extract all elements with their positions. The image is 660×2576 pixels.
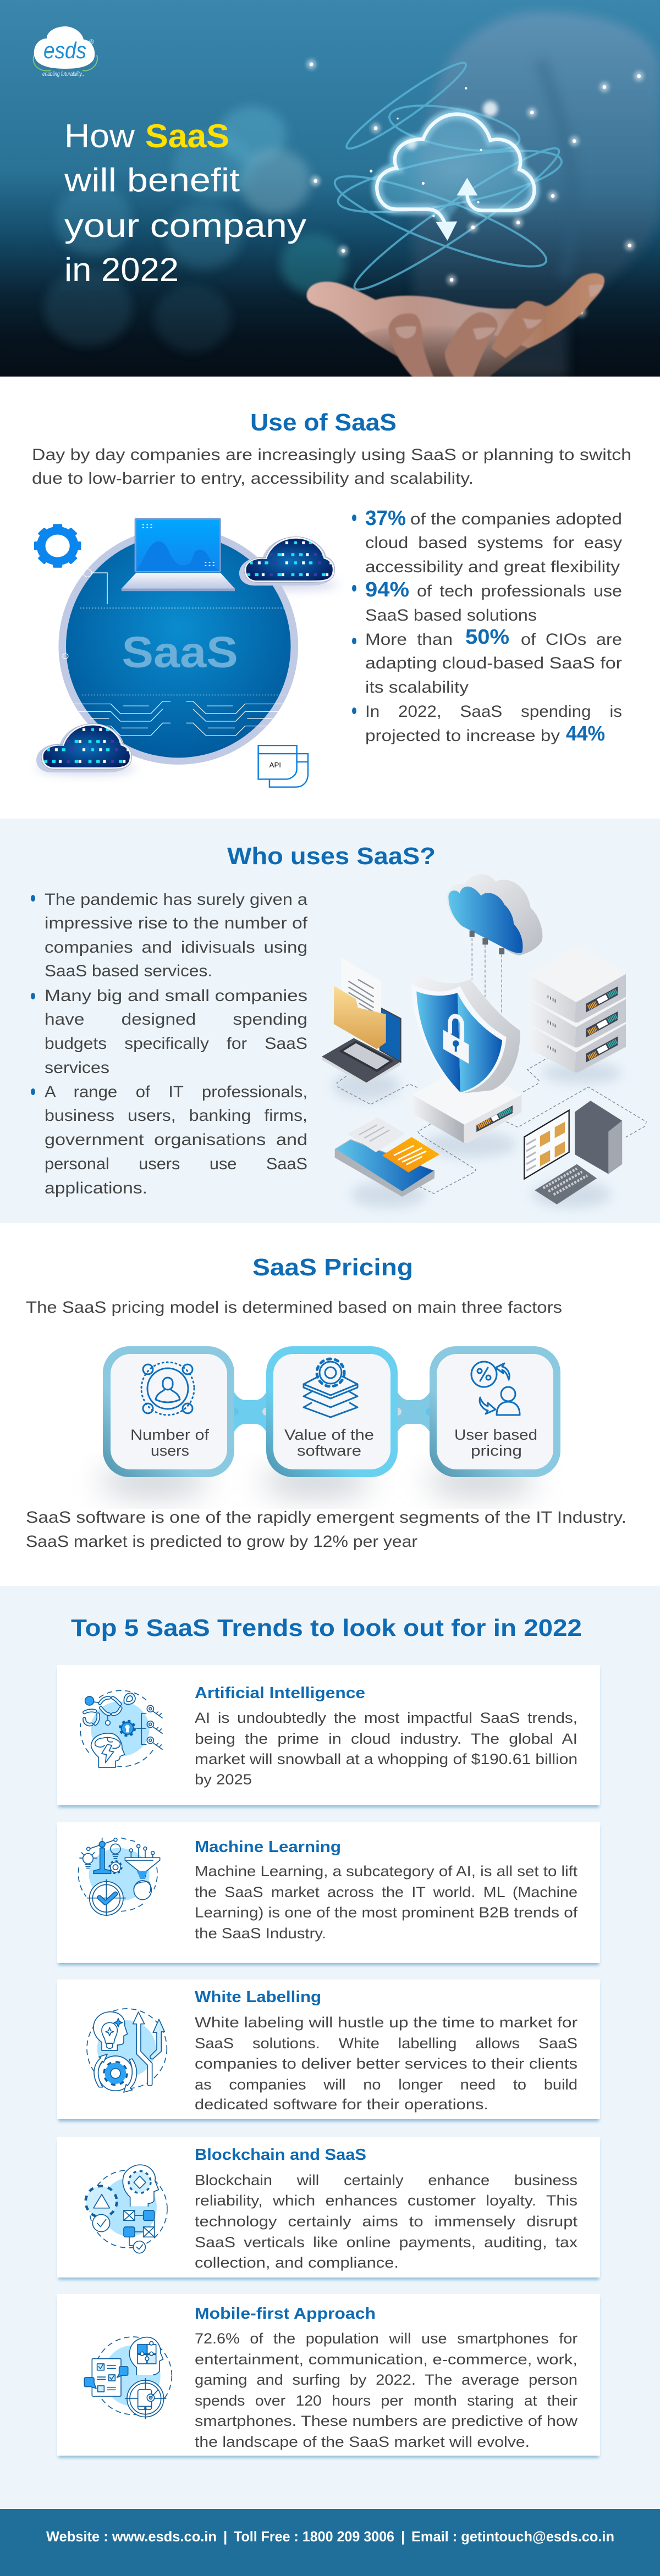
heading: Use of SaaS: Use of SaaS — [250, 409, 397, 436]
footer contact details: Toll Free : 1800 209 3006 — [234, 2528, 394, 2545]
bullet list: who uses SaaS: The pandemic has surely given a — [45, 891, 307, 909]
bullet list: use of SaaS stats: projected to increase by — [365, 727, 560, 745]
pricing closing text — [26, 1508, 626, 1551]
panel: hero banner — [0, 0, 660, 377]
cloud left — [36, 723, 132, 772]
bullet list: use of SaaS stats: 44% — [566, 722, 605, 745]
card text: machine learning: Learning) is one of the most prominent B2B trends of — [195, 1904, 578, 1921]
bullet list: who uses SaaS: personal users use SaaS — [45, 1155, 307, 1173]
card text: artificial intelligence — [195, 1684, 578, 1788]
bullet list: use of SaaS stats: SaaS based solutions — [365, 606, 537, 624]
bullet list: use of SaaS stats: More than — [365, 631, 453, 649]
bullet list: who uses SaaS: SaaS based services. — [45, 962, 212, 980]
panel: top 5 trends — [0, 1586, 660, 2509]
bullet list: who uses SaaS — [31, 891, 308, 1197]
bullet list: use of SaaS stats: of the companies adopted — [410, 510, 622, 528]
logo: esds cloud — [34, 26, 97, 71]
card text: white labelling: as companies will no longer need to build — [195, 2076, 578, 2093]
bullet list: use of SaaS stats: In 2022, SaaS spending is — [365, 703, 622, 721]
label: user based pricing — [454, 1427, 537, 1459]
desktop computer — [524, 1101, 622, 1204]
soft shadows — [37, 579, 338, 774]
label: value of the software: Value of the — [284, 1427, 374, 1443]
icon: API document — [258, 745, 308, 787]
cloud — [447, 874, 542, 955]
card text: white labelling: White Labelling — [195, 1988, 321, 2006]
hero title: How — [64, 118, 135, 154]
illustration: isometric cloud security network — [322, 874, 646, 1208]
card text: mobile-first approach: gaming and surfing by 2022. The average person — [195, 2372, 578, 2388]
hero title: SaaS — [145, 118, 229, 154]
icon: gear on layers — [304, 1359, 358, 1417]
bullet list: who uses SaaS: business users, banking firms, — [45, 1107, 307, 1125]
bullet list: who uses SaaS: impressive rise to the number of — [45, 914, 308, 932]
card text: mobile-first approach — [195, 2305, 578, 2450]
label: number of users: Number of — [130, 1427, 210, 1443]
bullet list: use of SaaS stats: 37% — [365, 507, 406, 530]
label: user based pricing: pricing — [471, 1442, 522, 1459]
phone with notes — [335, 1118, 439, 1197]
panel: who uses SaaS — [0, 819, 660, 1223]
dashed network links — [337, 938, 646, 1193]
card text: machine learning: the SaaS Industry. — [195, 1925, 326, 1942]
icon: blockchain — [86, 2165, 167, 2253]
card text: machine learning: the SaaS market across the IT world. ML (Machine — [195, 1884, 578, 1900]
heading: SaaS pricing: SaaS Pricing — [252, 1254, 413, 1281]
footer contact details — [46, 2528, 614, 2545]
illustration: SaaS sphere — [34, 518, 338, 787]
heading: top 5 trends: Top 5 SaaS Trends to look out for in 2022 — [71, 1615, 582, 1641]
card text: blockchain and SaaS: reliability, which enhances customer loyalty. This — [195, 2192, 578, 2209]
card: white labelling — [57, 1980, 600, 2119]
icon: percent and user — [471, 1362, 520, 1415]
bullet list: who uses SaaS: budgets specifically for SaaS — [45, 1035, 307, 1053]
hero title: will benefit — [64, 162, 240, 198]
glowing cloud icon — [377, 114, 534, 241]
card text: mobile-first approach: spends over 120 hours per month staring at their — [195, 2392, 578, 2409]
card: blockchain and SaaS — [57, 2137, 600, 2278]
footer contact details: | — [223, 2528, 227, 2545]
footer contact details: Email : getintouch@esds.co.in — [411, 2528, 614, 2545]
card text: machine learning: Machine Learning — [195, 1838, 341, 1856]
pricing closing text: SaaS market is predicted to grow by 12% per year — [26, 1533, 417, 1551]
bullet list: who uses SaaS: services — [45, 1059, 109, 1077]
card: value of the software — [266, 1346, 398, 1477]
footer bar — [0, 2509, 660, 2576]
sparkles — [307, 59, 644, 317]
bullet list: who uses SaaS: applications. — [45, 1179, 147, 1197]
card: number of users — [103, 1346, 234, 1477]
card text: white labelling — [195, 1988, 578, 2113]
heading: who uses SaaS: Who uses SaaS? — [227, 843, 436, 870]
card shadows — [58, 1669, 599, 2458]
logo tagline: enabling futurability.. — [42, 71, 84, 78]
bullet list: use of SaaS stats: cloud based systems for easy — [365, 534, 622, 552]
card text: blockchain and SaaS: Blockchain will certainly enhance business — [195, 2172, 578, 2188]
card: machine learning — [57, 1822, 600, 1963]
bullet list: who uses SaaS: government organisations and — [45, 1131, 307, 1149]
card text: blockchain and SaaS: SaaS verticals like online payments, auditing, tax — [195, 2234, 578, 2251]
footer contact details: | — [401, 2528, 405, 2545]
server stack — [530, 946, 626, 1073]
icon: gear — [34, 524, 81, 568]
hero bokeh lights — [44, 106, 346, 352]
bullet list: who uses SaaS: Many big and small companies — [45, 987, 307, 1005]
card text: blockchain and SaaS: Blockchain and SaaS — [195, 2146, 366, 2164]
card text: mobile-first approach: the landscape of the SaaS market will evolve. — [195, 2434, 530, 2450]
intro paragraph: use of SaaS: due to low-barrier to entry, accessibility and scalability. — [32, 469, 474, 488]
hero title: in 2022 — [64, 251, 179, 288]
person arm — [413, 12, 660, 377]
orbit rings — [333, 62, 563, 291]
open hand — [307, 273, 604, 377]
logo wordmark: esds — [43, 37, 86, 63]
card text: artificial intelligence: AI is undoubtedly the most impactful SaaS trends, — [195, 1710, 578, 1726]
card text: white labelling: White labeling will hustle up the time to market for — [195, 2014, 578, 2031]
laptop with folder — [322, 958, 400, 1086]
bullet list: use of SaaS stats: of tech professionals use — [417, 582, 622, 600]
bullet list: use of SaaS stats: its scalability — [365, 678, 469, 696]
API label: API — [270, 761, 281, 769]
icon: users network — [141, 1362, 194, 1415]
card text: machine learning — [195, 1838, 578, 1942]
card text: mobile-first approach: entertainment, communication, e-commerce, work, — [195, 2351, 578, 2368]
footer contact details: Website : www.esds.co.in — [46, 2528, 217, 2545]
bullet list: use of SaaS stats: accessibility and great flexibility — [365, 558, 620, 576]
card text: white labelling: SaaS solutions. White labelling allows SaaS — [195, 2035, 578, 2052]
card text: blockchain and SaaS: technology certainly aims to immensely disrupt — [195, 2213, 578, 2230]
bullet list: who uses SaaS: companies and idivisuals using — [45, 938, 307, 957]
label: number of users: users — [151, 1442, 189, 1459]
card: artificial intelligence — [57, 1665, 600, 1805]
logo registered mark: ® — [89, 38, 94, 46]
bullet list: who uses SaaS: have designed spending — [45, 1010, 307, 1029]
bullet list: use of SaaS stats: adapting cloud-based SaaS for — [365, 654, 622, 672]
bullet list: use of SaaS stats: of CIOs are — [521, 631, 622, 649]
label: value of the software — [284, 1427, 374, 1459]
bullet list: use of SaaS stats: 50% — [465, 626, 509, 649]
shield with lock — [411, 975, 520, 1093]
cloud right — [239, 537, 335, 585]
laptop — [122, 518, 235, 591]
label: value of the software: software — [297, 1442, 361, 1459]
card text: mobile-first approach: Mobile-first Approach — [195, 2305, 376, 2323]
panel: pricing factors — [99, 1346, 560, 1495]
bullet list: use of SaaS stats: 94% — [365, 578, 409, 601]
card text: mobile-first approach: 72.6% of the population will use smartphones for — [195, 2330, 578, 2347]
hero title — [64, 118, 306, 288]
bullet list: use of SaaS stats — [352, 507, 622, 745]
icon: mobile first — [84, 2337, 172, 2419]
bullet list: who uses SaaS: A range of IT professionals, — [45, 1083, 307, 1101]
card text: machine learning: Machine Learning, a subcategory of AI, is all set to lift — [195, 1863, 578, 1880]
card: user based pricing — [430, 1346, 560, 1477]
card text: artificial intelligence: market will snowball at a whopping of $190.61 billion — [195, 1751, 578, 1767]
card text: white labelling: companies to deliver better services to their clients — [195, 2055, 578, 2072]
sphere label: SaaS — [122, 627, 238, 677]
card text: mobile-first approach: smartphones. These numbers are predictive of how — [195, 2413, 578, 2429]
card shadows — [99, 1468, 536, 1495]
ground shadows — [333, 1062, 622, 1208]
icon: AI brain — [80, 1690, 162, 1767]
connectors — [231, 1385, 433, 1439]
label: user based pricing: User based — [454, 1427, 537, 1443]
card text: artificial intelligence: being the prime in cloud industry. The global AI — [195, 1731, 578, 1747]
icon: white labelling — [87, 2009, 167, 2092]
pricing closing text: SaaS software is one of the rapidly emergent segments of the IT Industry. — [26, 1508, 626, 1527]
sphere — [58, 528, 298, 765]
card: mobile-first approach — [57, 2294, 600, 2456]
connector lines — [63, 569, 287, 736]
right-hand hero artwork — [307, 12, 660, 377]
hero title: your company — [64, 207, 306, 244]
intro paragraph: use of SaaS: Day by day companies are increasingly using SaaS or planning to switch — [32, 446, 631, 464]
intro paragraph: use of SaaS — [32, 446, 631, 488]
card text: artificial intelligence: Artificial Intelligence — [195, 1684, 365, 1702]
card text: blockchain and SaaS — [195, 2146, 578, 2271]
card text: blockchain and SaaS: collection, and compliance. — [195, 2254, 399, 2271]
label: number of users — [130, 1427, 210, 1459]
card text: white labelling: dedicated software for their operations. — [195, 2096, 488, 2113]
card text: artificial intelligence: by 2025 — [195, 1771, 252, 1788]
icon: machine learning — [78, 1838, 160, 1916]
pricing intro text: The SaaS pricing model is determined based on main three factors — [26, 1298, 562, 1317]
base server — [413, 1064, 522, 1143]
